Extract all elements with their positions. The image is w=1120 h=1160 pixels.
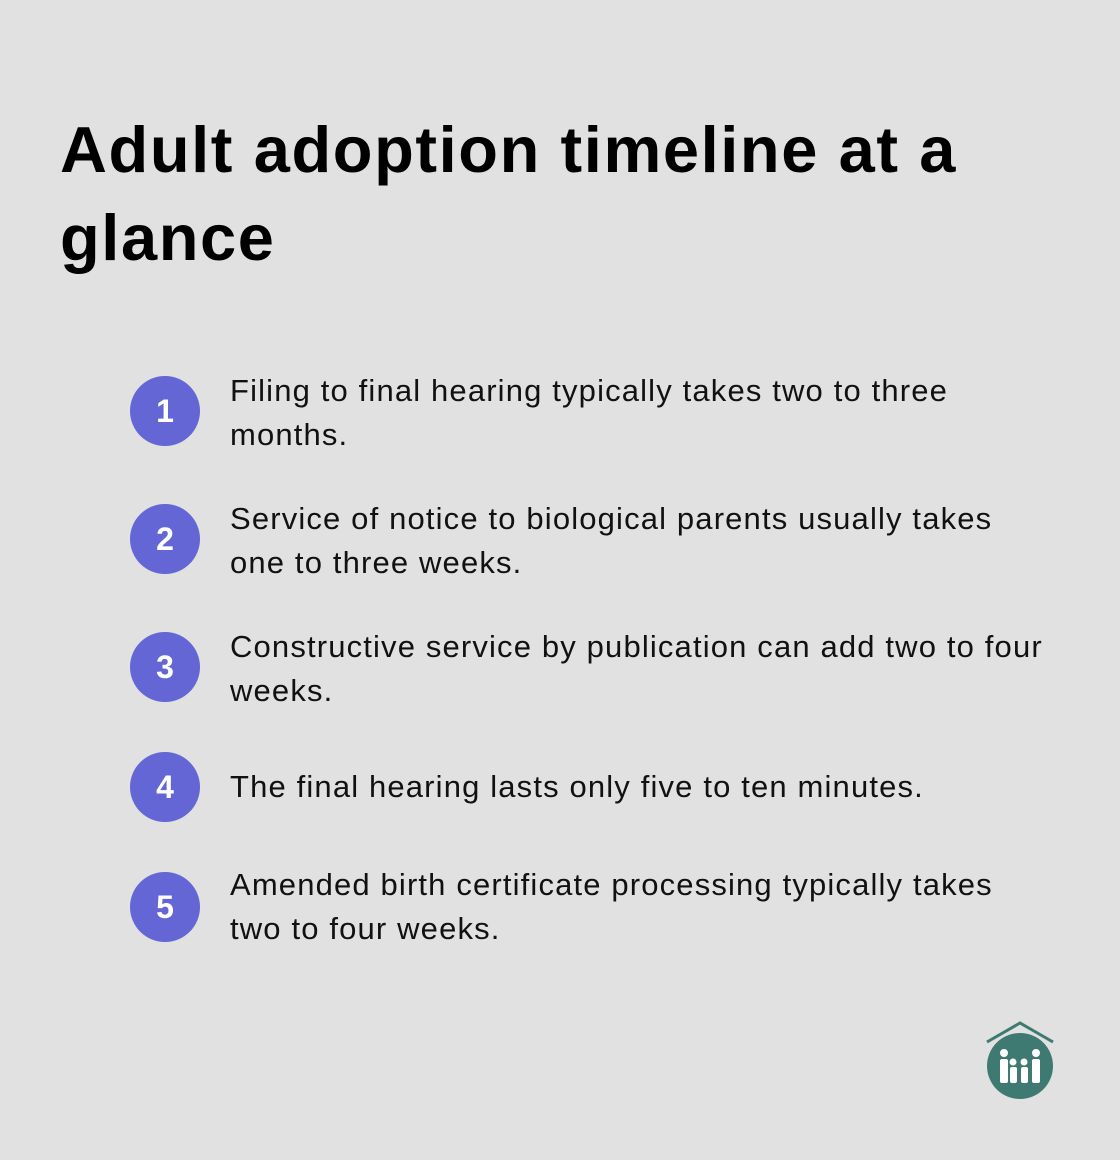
item 5	[130, 867, 993, 946]
icon: logo	[986, 1021, 1054, 1099]
text 2	[230, 501, 992, 580]
item 1	[130, 373, 948, 452]
number 5	[130, 872, 200, 942]
item 4	[130, 752, 924, 822]
text 5	[230, 867, 993, 946]
text 2: one to three weeks.	[230, 545, 522, 580]
number 1	[130, 376, 200, 446]
number 2: 2	[156, 521, 174, 557]
text 5: Amended birth certificate processing typically takes	[230, 867, 993, 902]
number 5: 5	[156, 889, 174, 925]
title	[60, 113, 957, 274]
text 2: Service of notice to biological parents usually takes	[230, 501, 992, 536]
title: Adult adoption timeline at a	[60, 113, 957, 186]
text 4: The final hearing lasts only five to ten minutes.	[230, 769, 924, 804]
number 3: 3	[156, 649, 174, 685]
item 2	[130, 501, 992, 580]
title: glance	[60, 201, 276, 274]
text 5: two to four weeks.	[230, 911, 501, 946]
item 3	[130, 629, 1043, 708]
text 1	[230, 373, 948, 452]
text 1: months.	[230, 417, 348, 452]
number 1: 1	[156, 393, 174, 429]
number 4	[130, 752, 200, 822]
number 4: 4	[156, 769, 174, 805]
text 3: Constructive service by publication can add two to four	[230, 629, 1043, 664]
text 3: weeks.	[230, 673, 333, 708]
text 1: Filing to final hearing typically takes two to three	[230, 373, 948, 408]
text 3	[230, 629, 1043, 708]
number 2	[130, 504, 200, 574]
number 3	[130, 632, 200, 702]
